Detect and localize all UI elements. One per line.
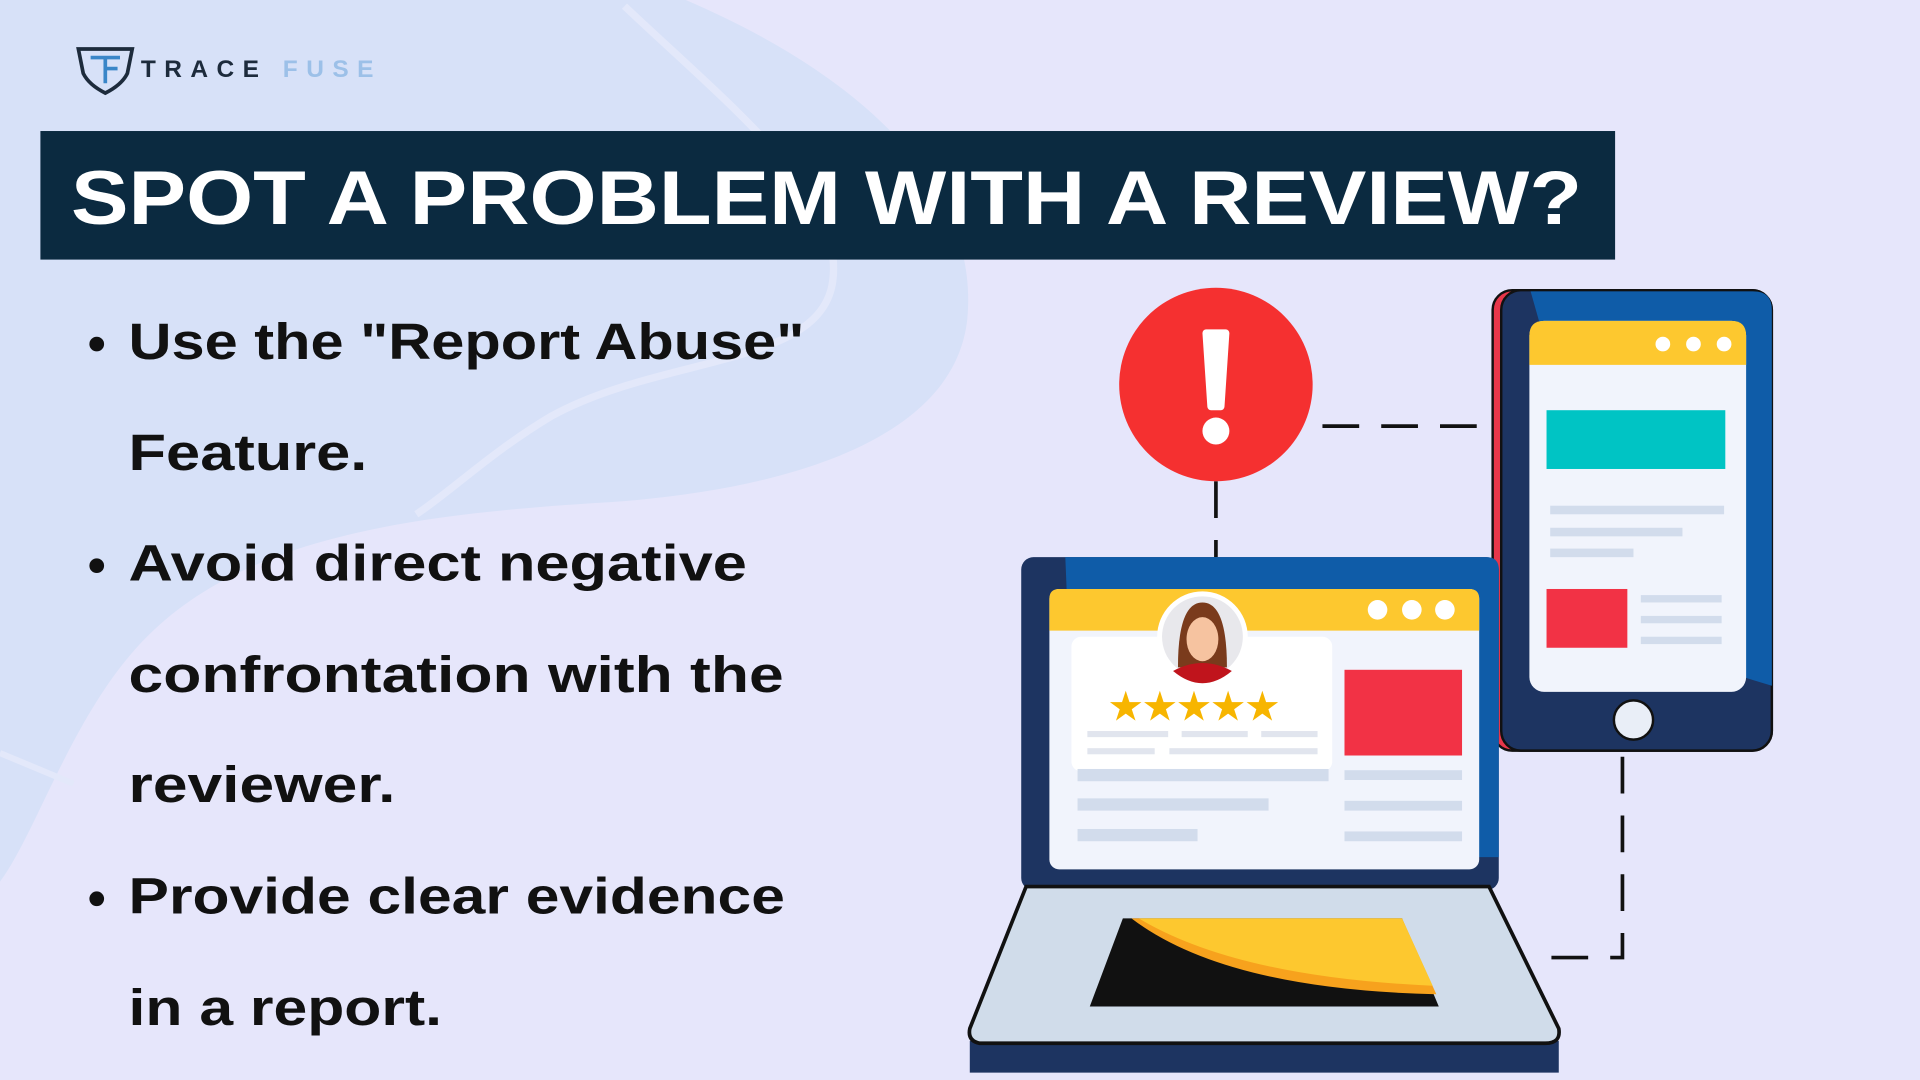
dashed connectors [1216, 426, 1622, 958]
bullet list: reviewer. [129, 755, 396, 813]
illustration [969, 288, 1772, 1073]
icon: alert circle [1119, 288, 1313, 481]
bullet list: in a report. [129, 978, 442, 1036]
icon: shield [78, 49, 132, 93]
laptop base [970, 1041, 1559, 1073]
bullet list: Use the "Report Abuse" [129, 312, 804, 370]
bullet list: Provide clear evidence [129, 866, 785, 924]
bullet list: confrontation with the [129, 645, 784, 703]
bullet list [89, 312, 804, 1036]
logo [78, 49, 373, 93]
title [40, 131, 1615, 260]
laptop [969, 557, 1559, 1073]
laptop screen [1021, 557, 1499, 890]
logo text: TRACE FUSE [141, 56, 373, 83]
bullet list: Feature. [129, 423, 367, 481]
title: SPOT A PROBLEM WITH A REVIEW? [71, 156, 1582, 241]
review card: ★★★★★ [1109, 686, 1280, 727]
bullet list: Avoid direct negative [129, 533, 747, 591]
phone [1493, 290, 1772, 751]
review card [1071, 591, 1332, 771]
